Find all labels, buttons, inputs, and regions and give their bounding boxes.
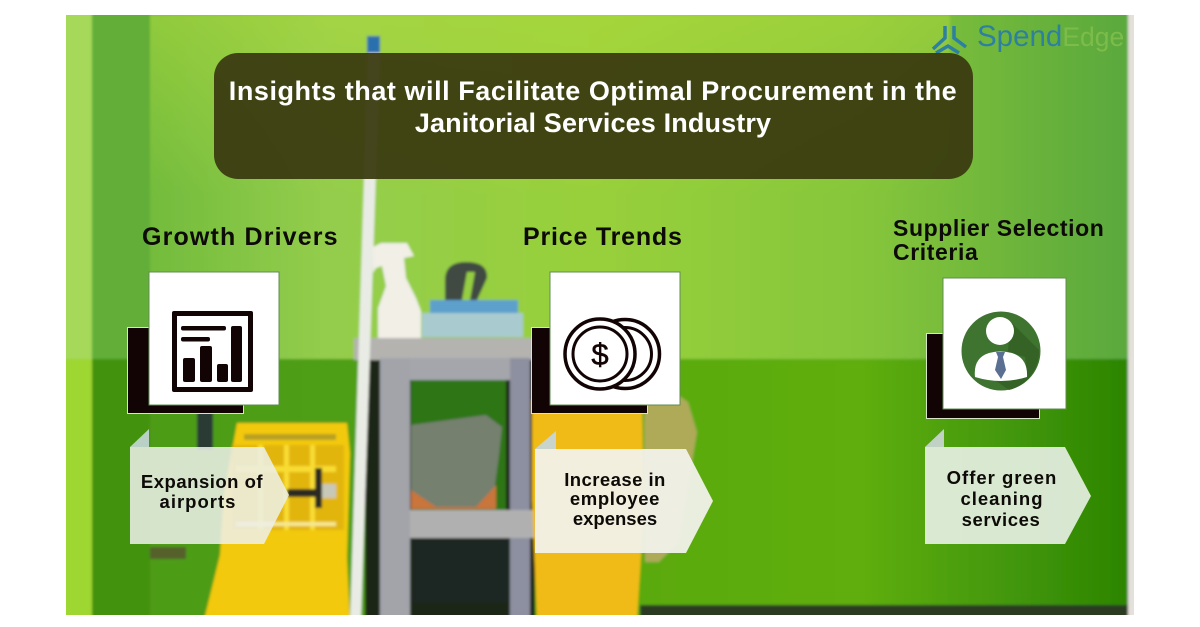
logo mark	[933, 26, 966, 53]
cart	[365, 358, 535, 620]
mop stick	[367, 36, 380, 54]
callout: employee	[570, 488, 660, 509]
icon card shadow	[926, 334, 1040, 418]
logo wordmark: SpendEdge	[977, 20, 1124, 53]
yellow bag	[532, 400, 644, 620]
logo: SpendEdge	[933, 20, 1124, 53]
icon card	[943, 278, 1066, 409]
callout	[925, 429, 1091, 544]
callout	[535, 431, 713, 553]
icon: report chart	[172, 311, 253, 392]
callout: Offer green	[947, 467, 1057, 488]
title banner: Janitorial Services Industry	[415, 108, 771, 138]
icon: business person	[962, 312, 1040, 390]
panel: supplier selection criteria	[893, 215, 1104, 544]
panel: growth drivers	[128, 223, 339, 544]
heading: Growth Drivers	[142, 223, 339, 251]
callout: cleaning	[960, 488, 1044, 509]
callout: Increase in	[564, 469, 666, 490]
icon card shadow	[128, 328, 244, 414]
heading: Price Trends	[523, 223, 683, 251]
yellow bucket	[204, 423, 350, 620]
callout: expenses	[573, 508, 657, 529]
callout: airports	[160, 491, 236, 512]
icon card shadow	[532, 328, 648, 414]
callout: services	[962, 509, 1040, 530]
spray bottle	[373, 243, 421, 338]
heading: Supplier Selection	[893, 215, 1104, 241]
panel: price trends	[523, 223, 713, 553]
callout: Expansion of	[141, 471, 263, 492]
icon: coins	[565, 319, 660, 389]
icon card	[550, 272, 680, 405]
title banner	[214, 53, 973, 179]
panel: supplier selection criteria: Criteria	[893, 239, 978, 265]
callout	[130, 429, 289, 544]
cloths and handle	[445, 262, 487, 300]
icon: coins: $	[591, 337, 609, 372]
icon card	[149, 272, 279, 405]
title text: Insights that will Facilitate Optimal Procurement in the	[229, 76, 957, 106]
